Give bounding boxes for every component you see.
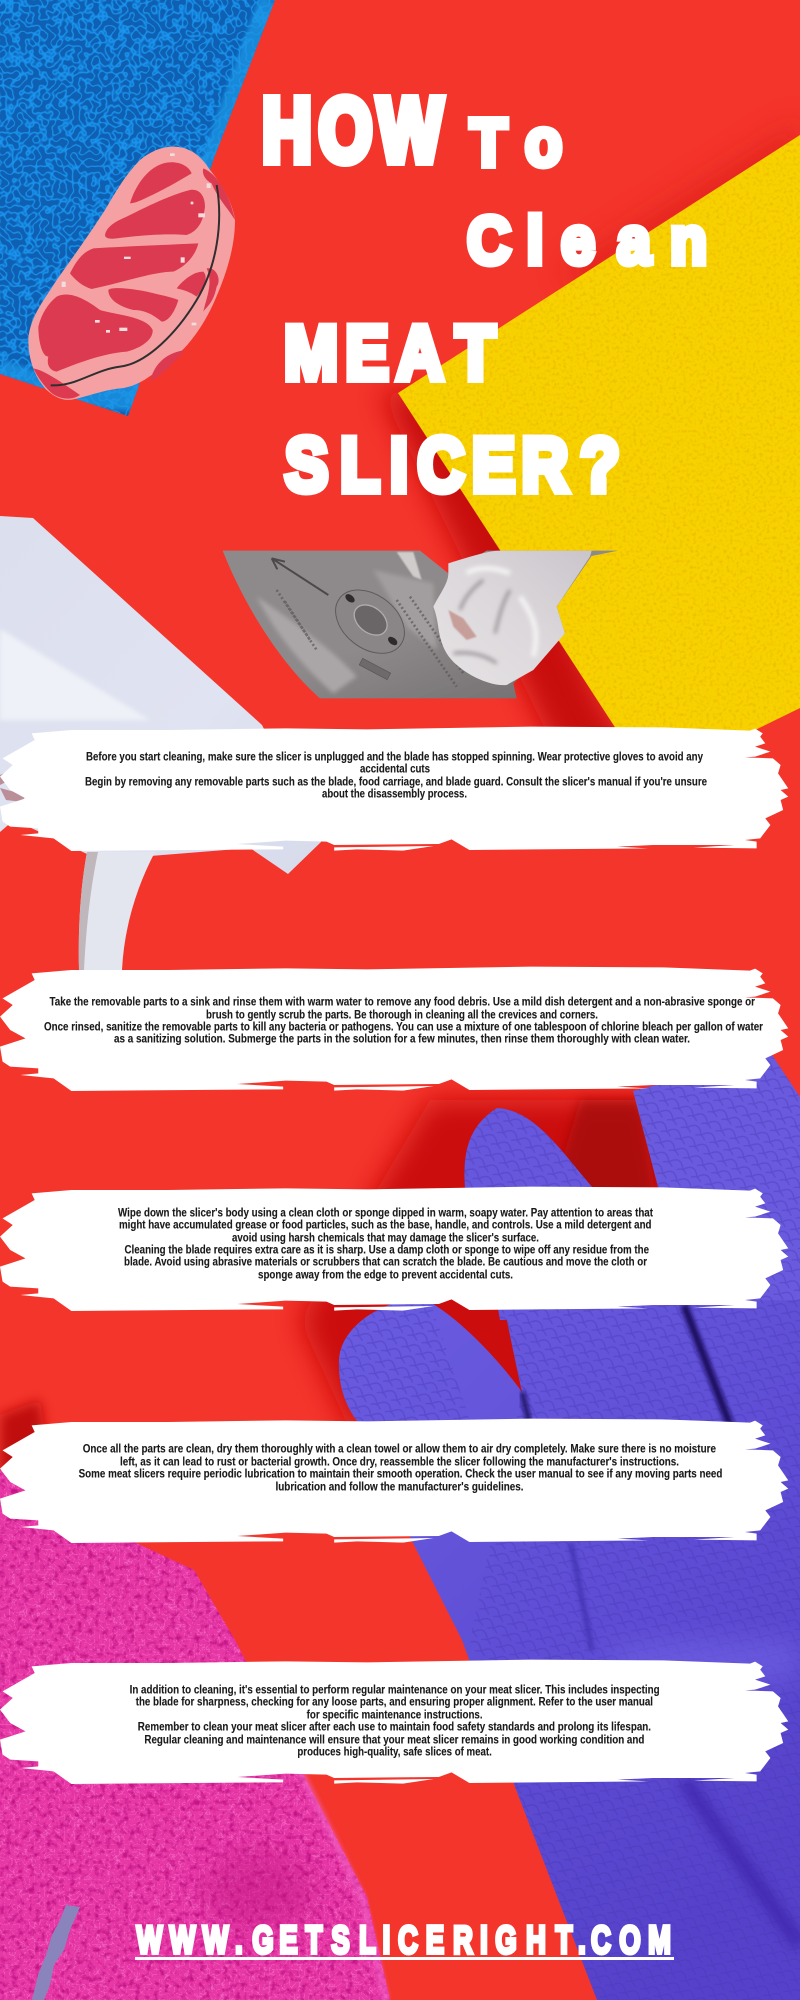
panel: step 5 maintenance <box>0 1660 788 1784</box>
title word: MEAT: MEAT <box>284 310 495 395</box>
step 5 text <box>130 1682 660 1758</box>
palm and thumb <box>339 1299 800 2000</box>
steak specks <box>62 153 211 333</box>
steak dark line <box>51 185 219 385</box>
title word: HOW: HOW <box>262 80 443 180</box>
steak red muscle <box>33 162 235 399</box>
panel: step 2 rinse and sanitize <box>0 967 788 1091</box>
step 3 text <box>118 1206 653 1282</box>
step 1 text <box>85 750 707 800</box>
step 5 text: produces high-quality, safe slices of meat. <box>297 1744 492 1758</box>
step 2 text: brush to gently scrub the parts. Be thorough in cleaning all the crevices and corners. <box>206 1008 598 1022</box>
blade engraved text <box>277 590 463 687</box>
step 5 text: for specific maintenance instructions. <box>307 1708 483 1722</box>
website footer <box>135 1919 674 1962</box>
step 3 text: sponge away from the edge to prevent accidental cuts. <box>258 1268 513 1282</box>
finger A <box>464 1108 640 1320</box>
red shadows <box>0 120 800 1480</box>
step 1 text: about the disassembly process. <box>322 786 467 800</box>
brush stroke <box>0 967 788 1091</box>
brush stroke <box>0 1187 788 1311</box>
url underline <box>135 1957 674 1960</box>
title word: To: To <box>470 105 562 180</box>
panel: step 4 dry and lubricate <box>0 1419 788 1543</box>
blue sponge <box>0 0 275 416</box>
step 3 text: avoid using harsh chemicals that may damage the slicer's surface. <box>232 1230 539 1244</box>
step 4 text <box>79 1442 722 1494</box>
blade highlights <box>257 597 357 693</box>
direction arrow <box>272 558 328 595</box>
towel thread <box>32 1905 80 2000</box>
step 1 text: accidental cuts <box>360 762 430 776</box>
blade <box>223 551 618 698</box>
step 5 text: In addition to cleaning, it's essential to perform regular maintenance on your meat slicer. This includes inspecting <box>130 1682 660 1696</box>
white plate <box>0 516 321 970</box>
step 3 text: blade. Avoid using abrasive materials or scrubbers that can scratch the blade. Be cautious and move the cloth or <box>124 1254 647 1268</box>
step 2 text <box>44 994 763 1046</box>
step 5 text: the blade for sharpness, checking for any loose parts, and ensuring proper alignment. Refer to the user manual <box>136 1694 653 1708</box>
step 5 text: Regular cleaning and maintenance will ensure that your meat slicer remains in good working condition and <box>144 1732 644 1746</box>
brush stroke <box>0 1660 788 1784</box>
step 3 text: Cleaning the blade requires extra care as it is sharp. Use a damp cloth or sponge to wipe off any residue from the <box>124 1242 649 1256</box>
step 5 text: Remember to clean your meat slicer after each use to maintain food safety standards and prolong its lifespan. <box>138 1720 651 1734</box>
photo: hand wiping slicer blade <box>223 551 618 698</box>
glove scale texture <box>339 1055 800 2000</box>
step 2 text: as a sanitizing solution. Submerge the parts in the solution for a few minutes, then rinse them thoroughly with clean water. <box>114 1032 690 1046</box>
finger B <box>633 1055 800 1420</box>
brush stroke <box>0 1419 788 1543</box>
cloth and hand <box>433 551 592 685</box>
steak fat outline <box>28 147 235 400</box>
plate handle <box>79 852 155 970</box>
purple rubber glove <box>339 1055 800 2000</box>
panel: step 3 wipe body and blade <box>0 1187 788 1311</box>
step 4 text: lubrication and follow the manufacturer's guidelines. <box>276 1480 524 1494</box>
plate scrap at left edge <box>0 765 26 802</box>
title <box>262 80 707 507</box>
cloth folds <box>453 580 510 663</box>
pink towel <box>0 1470 390 2000</box>
yellow sponge <box>398 135 800 735</box>
step 3 text: Wipe down the slicer's body using a clean cloth or sponge dipped in warm, soapy water. Pay attention to areas that <box>118 1206 653 1220</box>
panel: step 1 unplug and disassemble <box>0 727 788 851</box>
title word: Clean: Clean <box>467 203 707 278</box>
step 3 text: might have accumulated grease or food particles, such as the base, handle, and controls. Use a mild detergent and <box>119 1218 652 1232</box>
step 4 text: left, as it can lead to rust or bacterial growth. Once dry, reassemble the slicer following the manufacturer's instructions. <box>120 1454 679 1468</box>
title word: SLICER?: SLICER? <box>285 422 620 507</box>
blade hub <box>323 577 417 666</box>
illustration: meat steak <box>28 147 235 400</box>
glove creases <box>684 1305 730 1425</box>
website url: WWW.GETSLICERIGHT.COM <box>137 1919 671 1962</box>
brush stroke <box>0 727 788 851</box>
